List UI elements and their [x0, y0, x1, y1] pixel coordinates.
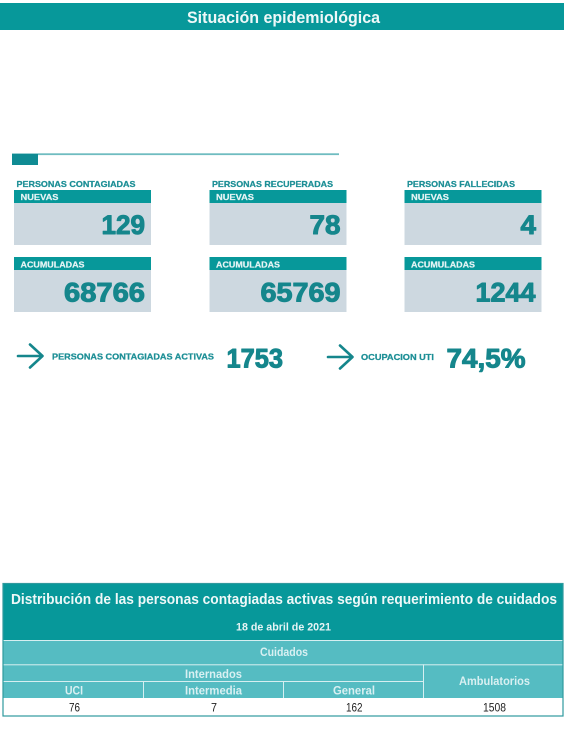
- table border: [3, 584, 563, 716]
- card: acumuladas fallecidas: [404, 257, 542, 312]
- card: nuevas fallecidas: [404, 190, 542, 245]
- heading: personas recuperadas: PERSONAS RECUPERADAS: [212, 179, 333, 189]
- table data row: 76: [69, 702, 80, 714]
- table header rows: Ambulatorios: [459, 674, 530, 688]
- card: nuevas recuperadas: NUEVAS: [216, 192, 254, 202]
- callout: personas contagiadas activas: [18, 344, 283, 374]
- table heading: [2, 583, 564, 640]
- table header rows: UCI: [65, 684, 83, 698]
- table header rows: Internados: [185, 667, 242, 681]
- table header rows: Intermedia: [185, 684, 242, 698]
- card: acumuladas recuperadas: [210, 257, 346, 312]
- card: acumuladas contagiadas: [14, 257, 151, 312]
- title banner: [0, 3, 564, 30]
- card: acumuladas contagiadas: 68766: [64, 278, 145, 308]
- callout: ocupacion UTI: [328, 344, 526, 374]
- card: nuevas recuperadas: [210, 190, 346, 245]
- card: nuevas contagiadas: NUEVAS: [20, 192, 59, 202]
- card: nuevas recuperadas: 78: [310, 210, 340, 240]
- table: distribución de personas contagiadas activas: [2, 583, 564, 716]
- table data row: 7: [211, 702, 217, 714]
- heading: personas contagiadas: PERSONAS CONTAGIADAS: [16, 179, 136, 189]
- table data row: 1508: [483, 702, 506, 714]
- card: acumuladas recuperadas: 65769: [260, 278, 340, 308]
- icon: arrow: [328, 346, 352, 368]
- panel: personas recuperadas: [210, 179, 346, 312]
- heading: personas fallecidas: PERSONAS FALLECIDAS: [407, 179, 515, 189]
- card: nuevas contagiadas: 129: [102, 210, 145, 240]
- table data row: [3, 698, 563, 716]
- label: ocupacion UTI: OCUPACION UTI: [361, 352, 434, 362]
- table data row: 162: [346, 702, 362, 714]
- label: contagiadas activas: PERSONAS CONTAGIADAS ACTIVAS: [52, 352, 214, 362]
- table header rows: [2, 640, 564, 698]
- table header rows: General: [333, 684, 375, 698]
- panel: personas contagiadas: [14, 179, 151, 312]
- title banner: Situación epidemiológica: [187, 9, 381, 27]
- card: nuevas contagiadas: [14, 190, 151, 245]
- card: acumuladas contagiadas: ACUMULADAS: [20, 260, 85, 270]
- table header rows: Cuidados: [260, 645, 308, 659]
- icon: arrow: [18, 344, 42, 368]
- table heading: 18 de abril de 2021: [236, 622, 331, 634]
- panel: personas fallecidas: [404, 179, 542, 312]
- card: acumuladas fallecidas: ACUMULADAS: [411, 260, 475, 270]
- card: acumuladas fallecidas: 1244: [476, 278, 536, 308]
- card: acumuladas recuperadas: ACUMULADAS: [216, 260, 280, 270]
- figure: 1753: 1753: [226, 344, 283, 374]
- figure: 74,5%: 74,5%: [446, 344, 526, 374]
- card: nuevas fallecidas: 4: [520, 210, 536, 240]
- card: nuevas fallecidas: NUEVAS: [411, 192, 449, 202]
- section divider marker: [12, 153, 339, 165]
